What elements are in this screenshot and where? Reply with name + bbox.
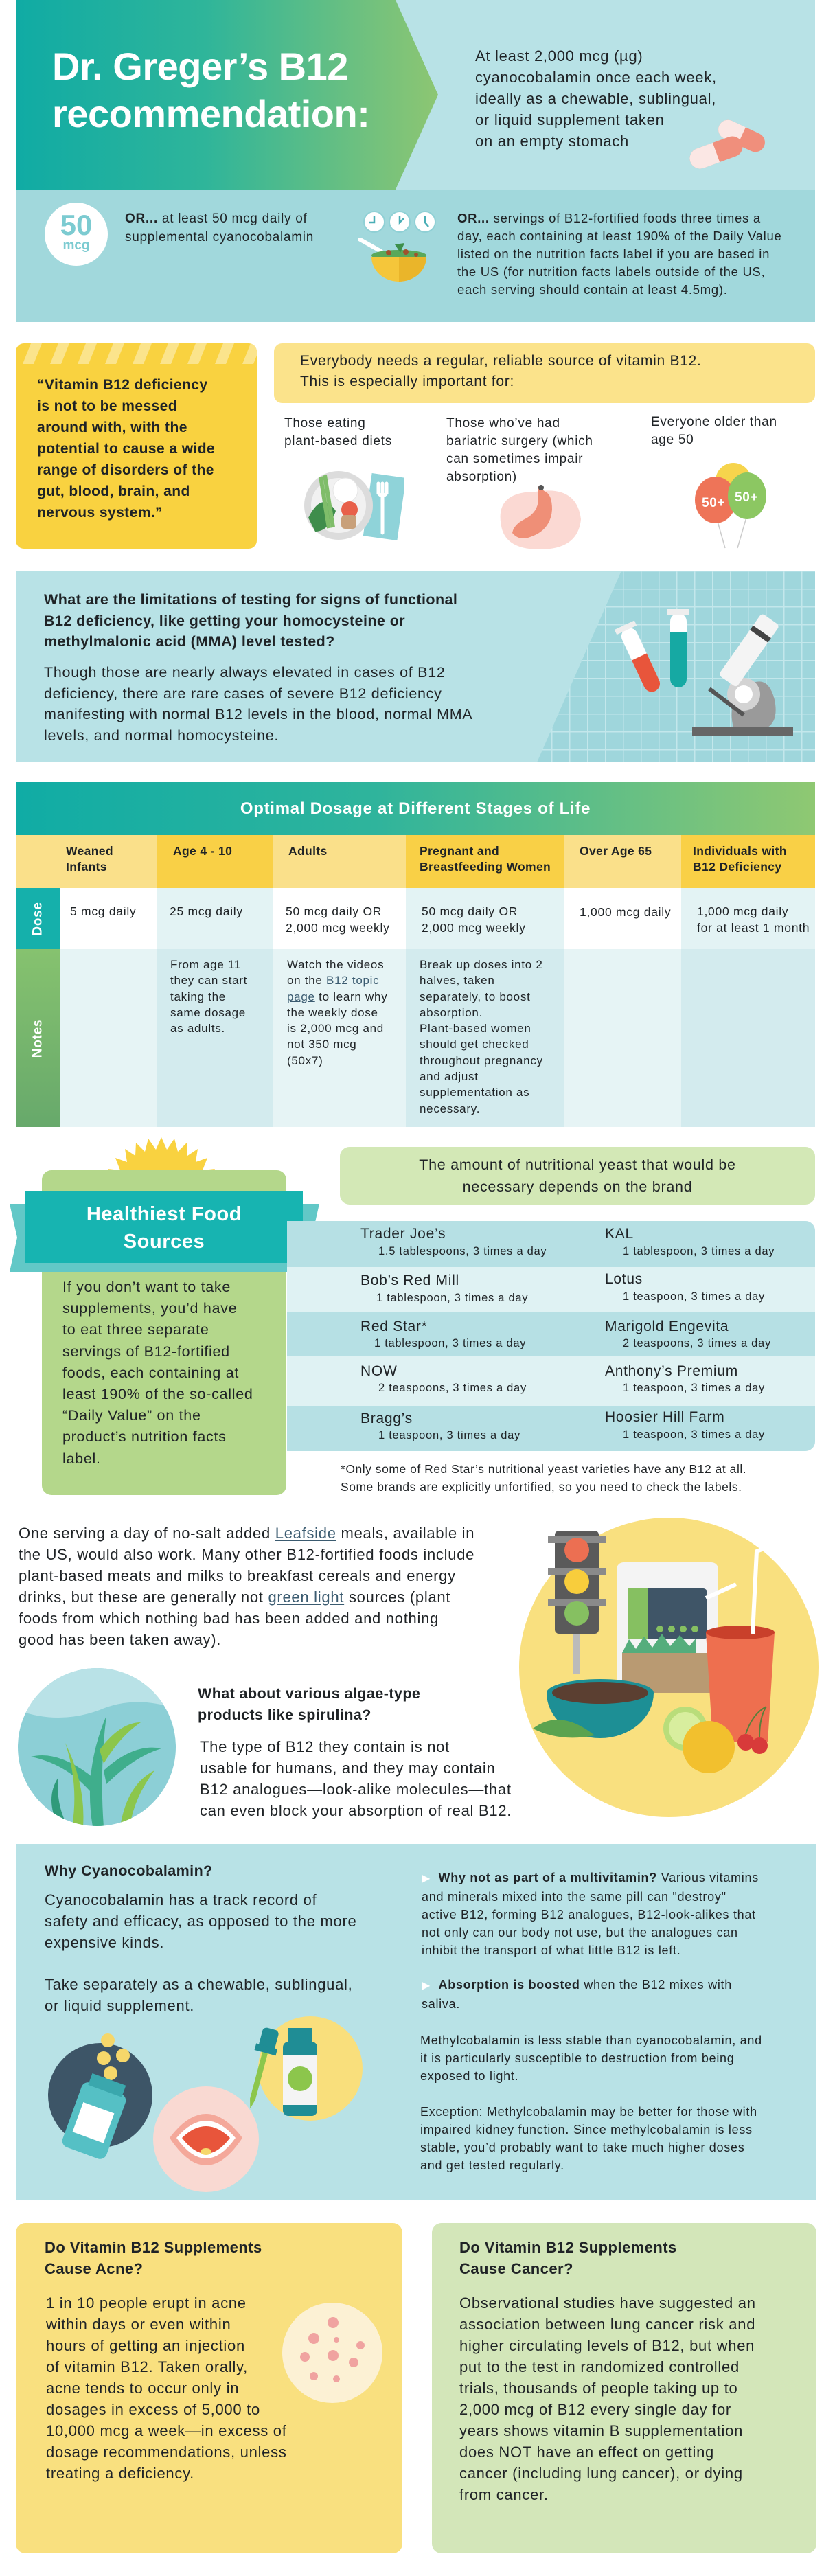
quote text: around with, with the xyxy=(37,420,187,435)
icon: supplements illustration xyxy=(48,2016,363,2192)
header recommendation text: ideally as a chewable, sublingual, xyxy=(475,90,716,107)
bullet: multivitamin: ▶ Why not as part of a multivitamin? Various vitamins xyxy=(422,1871,759,1884)
table: yeast brands: 1 teaspoon, 3 times a day xyxy=(378,1429,520,1441)
bullet: multivitamin: and minerals mixed into the same pill can "destroy" xyxy=(422,1890,726,1904)
icon: acne skin xyxy=(282,2303,382,2403)
header recommendation text: or liquid supplement taken xyxy=(475,111,665,128)
table: yeast brands: Marigold Engevita xyxy=(605,1319,729,1334)
heading: Cause Cancer? xyxy=(459,2260,573,2277)
body: expensive kinds. xyxy=(45,1934,164,1951)
body: hours of getting an injection xyxy=(46,2337,245,2354)
notes row: they can start xyxy=(170,974,247,987)
table: yeast brands: 1 teaspoon, 3 times a day xyxy=(623,1290,765,1303)
text: algae answer: The type of B12 they contain is not xyxy=(200,1738,450,1755)
table: yeast brands: 1 teaspoon, 3 times a day xyxy=(623,1428,765,1441)
dose row: Dose xyxy=(30,902,45,936)
table: yeast brands: NOW xyxy=(360,1363,397,1379)
heading: Do Vitamin B12 Supplements xyxy=(45,2239,262,2256)
notes row: (50x7) xyxy=(287,1054,323,1067)
body text: “Daily Value” on the xyxy=(62,1407,201,1424)
heading: algae question: products like spirulina? xyxy=(198,1707,371,1723)
notes row: taking the xyxy=(170,990,226,1003)
bullet: absorption: ▶ Absorption is boosted when the B12 mixes with xyxy=(422,1978,732,1992)
heading: What are the limitations of testing for signs of functional xyxy=(44,591,457,608)
text: Leafside paragraph: the US, would also work. Many other B12-fortified foods include xyxy=(19,1546,474,1563)
banner: everybody needs B12 xyxy=(274,343,815,403)
bullet: multivitamin: inhibit the transport of what little B12 is left. xyxy=(422,1944,680,1957)
bullet: absorption: saliva. xyxy=(422,1997,460,2011)
quote text: is not to be messed xyxy=(37,398,177,414)
body: does NOT have an effect on getting xyxy=(459,2443,714,2461)
notes row: as adults. xyxy=(170,1022,225,1035)
text: algae answer: can even block your absorption of real B12. xyxy=(200,1802,512,1819)
dose row: 2,000 mcg weekly xyxy=(286,920,390,934)
header panel xyxy=(16,0,815,190)
panel: healthiest food sources xyxy=(42,1170,286,1495)
footnote xyxy=(341,1462,746,1494)
alternatives band xyxy=(16,190,815,322)
panel: why cyanocobalamin xyxy=(16,1844,816,2200)
notes row: supplementation as xyxy=(420,1086,529,1099)
notes row: From age 11 xyxy=(170,958,241,971)
table: yeast brands: 1 tablespoon, 3 times a day xyxy=(623,1245,775,1257)
group: plant-based diets: plant-based diets xyxy=(284,434,392,448)
table: yeast brands: 2 teaspoons, 3 times a day xyxy=(623,1337,771,1349)
bullet: absorption xyxy=(422,1978,732,2011)
body: Observational studies have suggested an xyxy=(459,2294,756,2312)
panel: quote xyxy=(16,343,257,549)
dose row: 50 mcg daily OR xyxy=(286,904,382,918)
dose row: 25 mcg daily xyxy=(170,904,243,918)
text: methylcobalamin: exposed to light. xyxy=(420,2069,518,2083)
heading: Do Vitamin B12 Supplements xyxy=(459,2239,677,2256)
body: deficiency, there are rare cases of severe B12 deficiency xyxy=(44,685,442,702)
notes row: Plant-based women xyxy=(420,1022,531,1035)
icon: balloons xyxy=(695,463,766,548)
notes row: the weekly dose xyxy=(287,1006,378,1019)
table: optimal dosage xyxy=(16,782,815,1127)
bullet: multivitamin: active B12, forming B12 analogues, B12-look-alikes that xyxy=(422,1908,756,1922)
footnote: Some brands are explicitly unfortified, so you need to check the labels. xyxy=(341,1480,742,1494)
group: plant-based diets xyxy=(284,416,404,540)
title: recommendation: xyxy=(52,92,369,135)
table: yeast brands: Lotus xyxy=(605,1271,643,1287)
notes row: on the B12 topic xyxy=(287,974,379,987)
notes row: page to learn why xyxy=(287,990,387,1003)
text: exception xyxy=(420,2105,757,2172)
header recommendation text: on an empty stomach xyxy=(475,133,629,150)
text: fortified foods option: each serving should contain at least 4.5mg). xyxy=(457,282,728,297)
body: higher circulating levels of B12, but when xyxy=(459,2337,755,2354)
body: 2,000 mcg of B12 every single day for xyxy=(459,2401,731,2418)
text: exception: stable, you’d probably want to take much higher doses xyxy=(420,2141,744,2154)
ribbon: healthiest food sources title: Healthiest Food xyxy=(87,1203,242,1225)
text: 50 mcg option: supplemental cyanocobalamin xyxy=(125,230,314,244)
table title: Optimal Dosage at Different Stages of Life xyxy=(240,799,591,818)
body: from cancer. xyxy=(459,2486,549,2503)
banner: nutritional yeast xyxy=(340,1147,815,1205)
table title xyxy=(16,782,815,835)
table: yeast brands: Bob’s Red Mill xyxy=(360,1273,459,1288)
quote text: gut, blood, brain, and xyxy=(37,483,190,499)
heading xyxy=(45,2239,262,2277)
body: put to the test in randomized controlled xyxy=(459,2358,740,2375)
heading: algae question: What about various algae-type xyxy=(198,1685,420,1702)
heading: algae question xyxy=(198,1685,420,1723)
group: bariatric surgery: bariatric surgery (which xyxy=(446,434,593,448)
header row xyxy=(16,835,815,888)
body: dosage recommendations, unless xyxy=(46,2443,287,2461)
ribbon: healthiest food sources title xyxy=(10,1191,319,1272)
group: bariatric surgery: absorption) xyxy=(446,470,517,484)
body text xyxy=(62,1279,253,1467)
text: algae answer xyxy=(200,1738,512,1819)
header row: Infants xyxy=(66,860,107,874)
body: safety and efficacy, as opposed to the more xyxy=(45,1913,357,1930)
icon: fortified foods circle xyxy=(519,1518,819,1817)
header row: Individuals with xyxy=(693,844,787,858)
panel: why cyanocobalamin: Take separately as a chewable, sublingual, xyxy=(45,1976,353,1993)
text: Leafside paragraph xyxy=(19,1525,474,1648)
group: older than 50: Everyone older than xyxy=(651,415,777,429)
text: Leafside paragraph: One serving a day of no-salt added Leafside meals, available in xyxy=(19,1525,474,1542)
body: treating a deficiency. xyxy=(46,2465,194,2482)
heading xyxy=(44,591,457,650)
dose row: 2,000 mcg weekly xyxy=(422,920,526,934)
notes row: halves, taken xyxy=(420,974,495,987)
text: Leafside paragraph: plant-based meats and milks to breakfast cereals and energy xyxy=(19,1567,456,1584)
table: yeast brands: 1.5 tablespoons, 3 times a day xyxy=(378,1245,547,1257)
table: yeast brands: Hoosier Hill Farm xyxy=(605,1409,724,1425)
heading: Why Cyanocobalamin? xyxy=(45,1862,213,1879)
body xyxy=(46,2294,287,2482)
body text: foods, each containing at xyxy=(62,1365,239,1381)
notes row: not 350 mcg xyxy=(287,1038,356,1051)
body: association between lung cancer risk and xyxy=(459,2316,755,2333)
text: fortified foods option: the US (for nutrition facts labels outside of the US, xyxy=(457,264,765,279)
header row: Over Age 65 xyxy=(580,844,652,858)
table: yeast brands: 1 teaspoon, 3 times a day xyxy=(623,1382,765,1394)
text: exception: and get tested regularly. xyxy=(420,2158,564,2172)
bullet: multivitamin xyxy=(422,1871,759,1957)
dose row: 5 mcg daily xyxy=(70,904,136,918)
title xyxy=(52,45,369,135)
notes row: and adjust xyxy=(420,1070,479,1083)
icon: balloons: 50+ xyxy=(702,496,725,510)
text: fortified foods option: day, each containing at least 190% of the Daily Value xyxy=(457,229,782,243)
quote text: “Vitamin B12 deficiency xyxy=(37,377,208,393)
table: yeast brands xyxy=(287,1221,815,1451)
heading: B12 deficiency, like getting your homocysteine or xyxy=(44,613,405,629)
notes row xyxy=(16,949,815,1127)
dose row: 1,000 mcg daily xyxy=(697,904,788,918)
icon: 50 mcg badge: 50 xyxy=(60,209,92,241)
body: of vitamin B12. Taken orally, xyxy=(46,2358,248,2375)
banner: nutritional yeast: necessary depends on the brand xyxy=(463,1178,692,1195)
header chevron xyxy=(16,0,438,190)
icon: salad bowl xyxy=(358,238,426,282)
body: 1 in 10 people erupt in acne xyxy=(46,2294,247,2312)
text: fortified foods option: OR... servings of B12-fortified foods three times a xyxy=(457,211,761,225)
notes row: is 2,000 mcg and xyxy=(287,1022,384,1035)
text: 50 mcg option xyxy=(125,212,314,244)
table: yeast brands: 2 teaspoons, 3 times a day xyxy=(378,1382,527,1394)
icon: 50 mcg badge: mcg xyxy=(62,238,90,253)
banner: nutritional yeast: The amount of nutritional yeast that would be xyxy=(419,1156,736,1173)
icon: algae circle xyxy=(18,1668,176,1826)
notes row: Break up doses into 2 xyxy=(420,958,543,971)
text: Leafside paragraph: foods from which nothing bad has been added and nothing xyxy=(19,1610,439,1627)
panel: testing limitations xyxy=(16,571,815,762)
body text: supplements, you’d have xyxy=(62,1300,237,1317)
notes row: should get checked xyxy=(420,1038,529,1051)
text: exception: impaired kidney function. Since methylcobalamin is less xyxy=(420,2123,753,2136)
quote text: potential to cause a wide xyxy=(37,441,215,457)
dose row: 1,000 mcg daily xyxy=(580,905,671,919)
icon: pills xyxy=(689,119,765,169)
icon: stomach xyxy=(500,485,581,549)
quote text: nervous system.” xyxy=(37,505,163,521)
body text: servings of B12-fortified xyxy=(62,1343,230,1360)
group: bariatric surgery: Those who’ve had xyxy=(446,416,560,431)
text: methylcobalamin: it is particularly susceptible to destruction from being xyxy=(420,2051,735,2065)
body text: label. xyxy=(62,1450,101,1467)
header row: Age 4 - 10 xyxy=(173,844,232,858)
banner: everybody needs B12: Everybody needs a regular, reliable source of vitamin B12. xyxy=(300,353,702,369)
ribbon: healthiest food sources title: Sources xyxy=(124,1231,205,1253)
table: yeast brands: Red Star* xyxy=(360,1319,428,1334)
body: years shows vitamin B supplementation xyxy=(459,2422,743,2439)
body: 10,000 mcg a week—in excess of xyxy=(46,2422,287,2439)
header row: Breastfeeding Women xyxy=(420,860,551,874)
notes row: Notes xyxy=(30,1019,45,1058)
notes row: separately, to boost xyxy=(420,990,531,1003)
text: exception: Exception: Methylcobalamin may be better for those with xyxy=(420,2105,757,2119)
quote text xyxy=(37,377,215,521)
icon: test tubes and microscope xyxy=(615,609,793,736)
icon: plate xyxy=(304,471,404,540)
dose row: 50 mcg daily OR xyxy=(422,904,518,918)
body text: If you don’t want to take xyxy=(62,1279,231,1295)
text: 50 mcg option: OR... at least 50 mcg daily of xyxy=(125,212,308,226)
banner: everybody needs B12: This is especially important for: xyxy=(300,374,514,389)
body xyxy=(45,1891,357,1951)
body: Cyanocobalamin has a track record of xyxy=(45,1891,317,1908)
header row: B12 Deficiency xyxy=(693,860,781,874)
notes row: throughout pregnancy xyxy=(420,1054,543,1067)
group: plant-based diets: Those eating xyxy=(284,416,365,431)
header row: Adults xyxy=(288,844,328,858)
panel: acne xyxy=(16,2223,402,2553)
dose row xyxy=(16,888,810,949)
brand rows: Trader Joe’s xyxy=(360,1226,446,1242)
header recommendation text xyxy=(475,47,717,150)
text: Leafside paragraph: good has been taken away). xyxy=(19,1631,221,1648)
header row: Weaned xyxy=(66,844,113,858)
bullet: multivitamin: not only can our body not use, but the analogues can xyxy=(422,1926,738,1939)
notes row: same dosage xyxy=(170,1006,246,1019)
heading: methylmalonic acid (MMA) level tested? xyxy=(44,633,335,650)
panel: why cyanocobalamin: or liquid supplement. xyxy=(45,1997,194,2014)
body text: product’s nutrition facts xyxy=(62,1428,227,1445)
body: dosages in excess of 5,000 to xyxy=(46,2401,260,2418)
table: yeast brands: 1 tablespoon, 3 times a day xyxy=(374,1337,526,1349)
text: methylcobalamin: Methylcobalamin is less stable than cyanocobalamin, and xyxy=(420,2033,762,2047)
table: yeast brands: Bragg’s xyxy=(360,1411,413,1426)
icon: balloons: 50+ xyxy=(735,490,758,505)
group: older than 50 xyxy=(651,415,777,548)
group: bariatric surgery xyxy=(446,416,593,549)
quote text: range of disorders of the xyxy=(37,462,214,478)
body text: to eat three separate xyxy=(62,1321,209,1338)
header recommendation text: At least 2,000 mcg (µg) xyxy=(475,47,643,65)
icon: 50 mcg badge xyxy=(45,203,108,266)
header row: Pregnant and xyxy=(420,844,499,858)
dose row: for at least 1 month xyxy=(697,920,810,934)
panel: cancer xyxy=(432,2223,816,2553)
notes row: absorption. xyxy=(420,1006,483,1019)
icon: clocks xyxy=(363,211,436,233)
body: trials, thousands of people taking up to xyxy=(459,2380,737,2397)
body text: least 190% of the so-called xyxy=(62,1386,253,1402)
body: Though those are nearly always elevated in cases of B12 xyxy=(44,664,446,681)
body: within days or even within xyxy=(46,2316,231,2333)
heading xyxy=(459,2239,677,2277)
text: Leafside paragraph: drinks, but these are generally not green light sources (plant xyxy=(19,1588,450,1606)
table: yeast brands: 1 tablespoon, 3 times a day xyxy=(376,1292,528,1304)
group: bariatric surgery: can sometimes impair xyxy=(446,452,583,466)
body: manifesting with normal B12 levels in the blood, normal MMA xyxy=(44,706,472,722)
footnote: *Only some of Red Star’s nutritional yeast varieties have any B12 at all. xyxy=(341,1462,746,1476)
icon: sunburst xyxy=(108,1137,215,1170)
text: algae answer: usable for humans, and they may contain xyxy=(200,1759,495,1777)
title: Dr. Greger’s B12 xyxy=(52,45,348,88)
header recommendation text: cyanocobalamin once each week, xyxy=(475,69,717,86)
table: yeast brands: KAL xyxy=(605,1226,634,1242)
text: fortified foods option xyxy=(457,211,782,297)
text: methylcobalamin xyxy=(420,2033,762,2083)
body: levels, and normal homocysteine. xyxy=(44,727,279,744)
text: algae answer: B12 analogues—look-alike molecules—that xyxy=(200,1781,512,1798)
heading: Cause Acne? xyxy=(45,2260,143,2277)
body: cancer (including lung cancer), or dying xyxy=(459,2465,743,2482)
notes row: Watch the videos xyxy=(287,958,384,971)
body: acne tends to occur only in xyxy=(46,2380,239,2397)
table: yeast brands: Anthony’s Premium xyxy=(605,1363,738,1379)
text: fortified foods option: listed on the nutrition facts label if you are based in xyxy=(457,247,770,261)
notes row: necessary. xyxy=(420,1102,480,1115)
body xyxy=(459,2294,756,2503)
body xyxy=(44,664,472,744)
group: older than 50: age 50 xyxy=(651,433,694,447)
